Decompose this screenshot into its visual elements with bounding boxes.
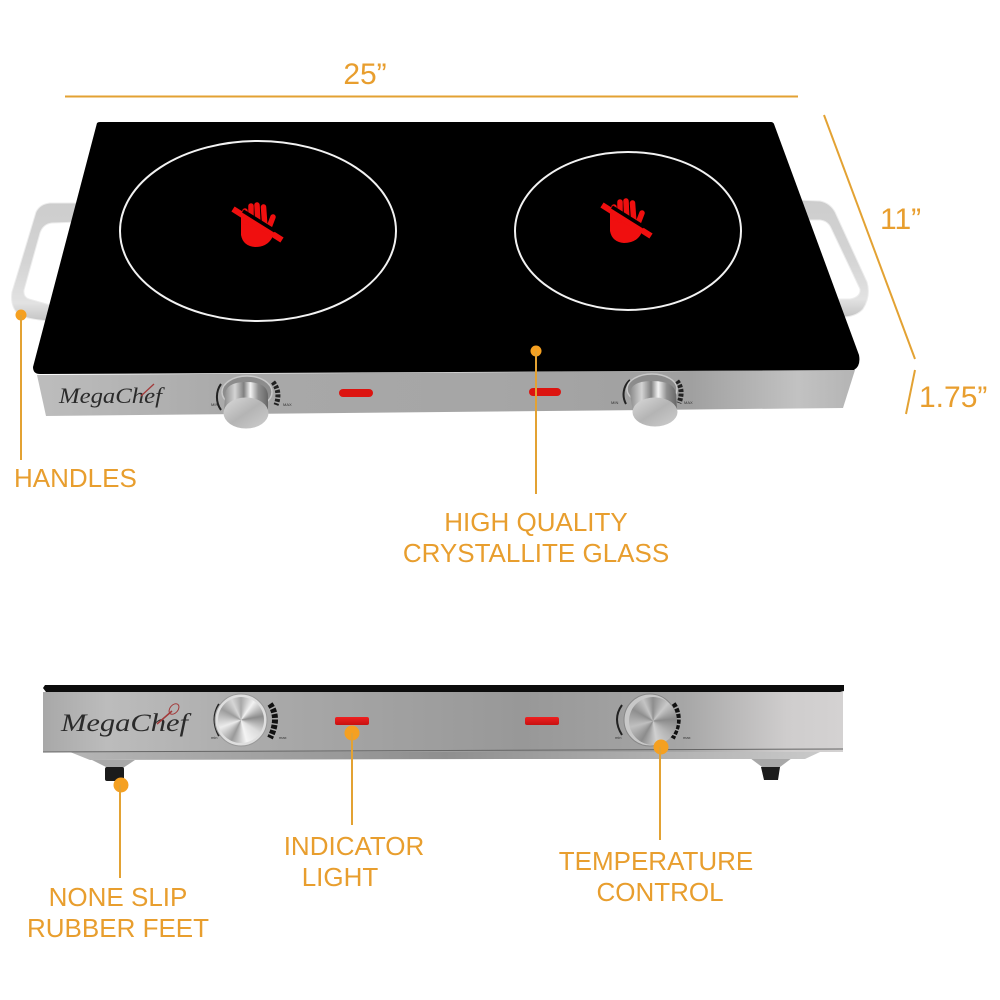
callout: indicator light bbox=[284, 726, 424, 892]
control: left knob: MAX bbox=[283, 402, 292, 407]
control: right dial bbox=[615, 694, 691, 746]
control: left dial: min bbox=[211, 735, 217, 740]
control: left knob: MIN bbox=[211, 402, 218, 407]
illustration: cooktop perspective view bbox=[12, 122, 868, 428]
panel: black glass top bbox=[33, 122, 859, 374]
callout: crystallite glass bbox=[403, 346, 669, 568]
control: right knob bbox=[611, 374, 693, 426]
burner ring: right bbox=[515, 152, 741, 310]
callout: indicator light: INDICATOR bbox=[284, 831, 424, 861]
logo: MegaChef on front panel: MegaChef bbox=[58, 383, 165, 408]
control: right knob: MAX bbox=[684, 400, 693, 405]
icon: right handle bbox=[795, 200, 868, 317]
icon: left handle bbox=[12, 203, 80, 321]
callout: rubber feet: NONE SLIP bbox=[49, 882, 187, 912]
callout: indicator light: LIGHT bbox=[302, 862, 378, 892]
dimension: depth 11 inches: 11” bbox=[880, 203, 921, 236]
panel: stainless front bbox=[37, 370, 855, 416]
icon: hot surface hand left bbox=[233, 205, 282, 247]
logo: MegaChef on front panel: MegaChef bbox=[60, 710, 192, 737]
indicator: left lamp bbox=[335, 717, 369, 725]
control: left knob bbox=[211, 376, 292, 428]
base strip bbox=[70, 752, 820, 760]
control: right knob: MIN bbox=[611, 400, 618, 405]
callout: temperature control: TEMPERATURE bbox=[559, 846, 753, 876]
panel: stainless front bbox=[43, 692, 843, 752]
panel: black glass edge bbox=[43, 685, 844, 692]
indicator: right lamp bbox=[525, 717, 559, 725]
dimension: width 25 inches: 25” bbox=[343, 58, 387, 91]
callout: crystallite glass: HIGH QUALITY bbox=[444, 507, 628, 537]
callout: rubber feet bbox=[27, 778, 209, 943]
indicator: left lamp bbox=[339, 389, 373, 397]
burner ring: left bbox=[120, 141, 396, 321]
callout: temperature control bbox=[559, 740, 753, 907]
callout: rubber feet: RUBBER FEET bbox=[27, 913, 209, 943]
logo: MegaChef on front panel bbox=[60, 702, 192, 737]
dimension: height 1.75 inches bbox=[906, 370, 987, 414]
callout: temperature control: CONTROL bbox=[596, 877, 724, 907]
dimension: height 1.75 inches: 1.75” bbox=[919, 381, 987, 414]
callout: handles: HANDLES bbox=[14, 463, 137, 493]
control: left dial bbox=[211, 694, 287, 746]
dimension: depth 11 inches bbox=[824, 115, 921, 359]
foot: right rubber foot bbox=[750, 758, 792, 780]
control: right dial: min bbox=[615, 735, 621, 740]
callout: crystallite glass: CRYSTALLITE GLASS bbox=[403, 538, 669, 568]
foot: left rubber foot bbox=[92, 760, 135, 781]
illustration: cooktop front view bbox=[43, 685, 844, 781]
control: left dial: max bbox=[279, 735, 287, 740]
indicator: right lamp bbox=[529, 388, 561, 396]
callout: handles bbox=[14, 310, 137, 493]
control: right dial: max bbox=[683, 735, 691, 740]
icon: hot surface hand right bbox=[602, 201, 651, 243]
